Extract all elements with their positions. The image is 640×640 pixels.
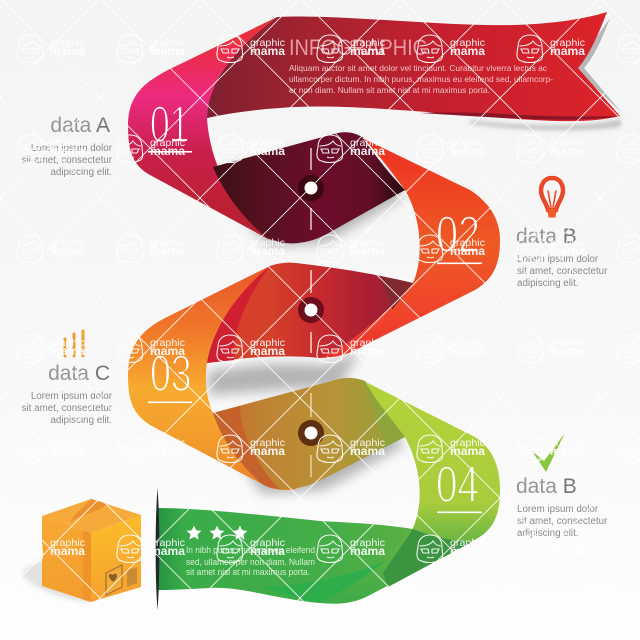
ribbon shadows	[207, 18, 622, 494]
olive fold panel	[213, 378, 405, 489]
icon: bar chart	[65, 331, 83, 356]
text block: data B upper	[516, 225, 608, 289]
icon: light bulb	[541, 178, 563, 217]
text block: data B lower	[516, 475, 608, 539]
step number 01: 01	[150, 96, 189, 154]
banner paragraph: ullamcorper dictum. In nibh purus, maximus eu eleifend sed, ullamcorp-	[289, 74, 553, 84]
text block: data B lower: sit amet, consectetur	[517, 516, 608, 527]
text block: data C: adipiscing elit.	[50, 415, 112, 426]
text block: data A: sit amet, consectetur	[22, 155, 113, 166]
green ribbon paragraph	[186, 545, 315, 577]
text block: data B upper: Lorem ipsum dolor	[517, 254, 599, 265]
ribbon step 04: green band	[320, 379, 500, 604]
green ribbon tail	[158, 508, 472, 603]
step number 02: 02	[436, 205, 480, 263]
text block: data A: data A	[50, 114, 110, 137]
text block: data B upper: data B	[516, 225, 577, 248]
text block: data B lower: adipiscing elit.	[517, 528, 579, 539]
banner paragraph	[289, 63, 553, 95]
ribbon step 03: orange band	[128, 265, 297, 490]
pin 3	[298, 420, 324, 446]
green ribbon paragraph: sed, ullamcorper non diam. Nullam	[186, 557, 315, 567]
banner paragraph: er non diam. Nullam sit amet nisl at mi maximus porta.	[289, 85, 490, 95]
icon: cardboard box	[23, 499, 141, 602]
text block: data B upper: adipiscing elit.	[517, 278, 579, 289]
red band 02	[320, 132, 500, 358]
icon: three stars	[187, 526, 247, 539]
text block: data A	[22, 114, 113, 178]
ribbon step 01: pink band	[128, 17, 277, 240]
step number 03: 03	[150, 344, 192, 402]
dark ribbon slit	[156, 488, 159, 610]
title: INFOGRAPHIC	[289, 35, 427, 60]
pin 1	[298, 175, 324, 201]
text block: data A: Lorem ipsum dolor	[31, 143, 113, 154]
text block: data B lower: data B	[516, 475, 577, 498]
banner paragraph: Aliquam auctor sit amet dolor vel tincidunt. Curabitur viverra lectus ac	[289, 63, 547, 73]
text block: data B lower: Lorem ipsum dolor	[517, 504, 599, 515]
green ribbon paragraph: sit amet nisl at mi maximus porta.	[186, 567, 310, 577]
text block: data C: sit amet, consectetur	[22, 403, 113, 414]
text block: data C: data C	[48, 362, 110, 385]
top ribbon banner	[207, 12, 620, 121]
text block: data A: adipiscing elit.	[50, 167, 112, 178]
icon: check mark	[532, 433, 565, 472]
text block: data B upper: sit amet, consectetur	[517, 266, 608, 277]
red fold panel	[207, 263, 413, 363]
text block: data C: Lorem ipsum dolor	[31, 391, 113, 402]
dark fold panel	[213, 132, 405, 243]
step number 04: 04	[436, 455, 479, 513]
green ribbon paragraph: In nibh purus, maximus eu eleifend	[186, 545, 315, 555]
pin 2	[298, 297, 324, 323]
center dashed axis	[310, 148, 312, 477]
text block: data C	[22, 362, 113, 426]
